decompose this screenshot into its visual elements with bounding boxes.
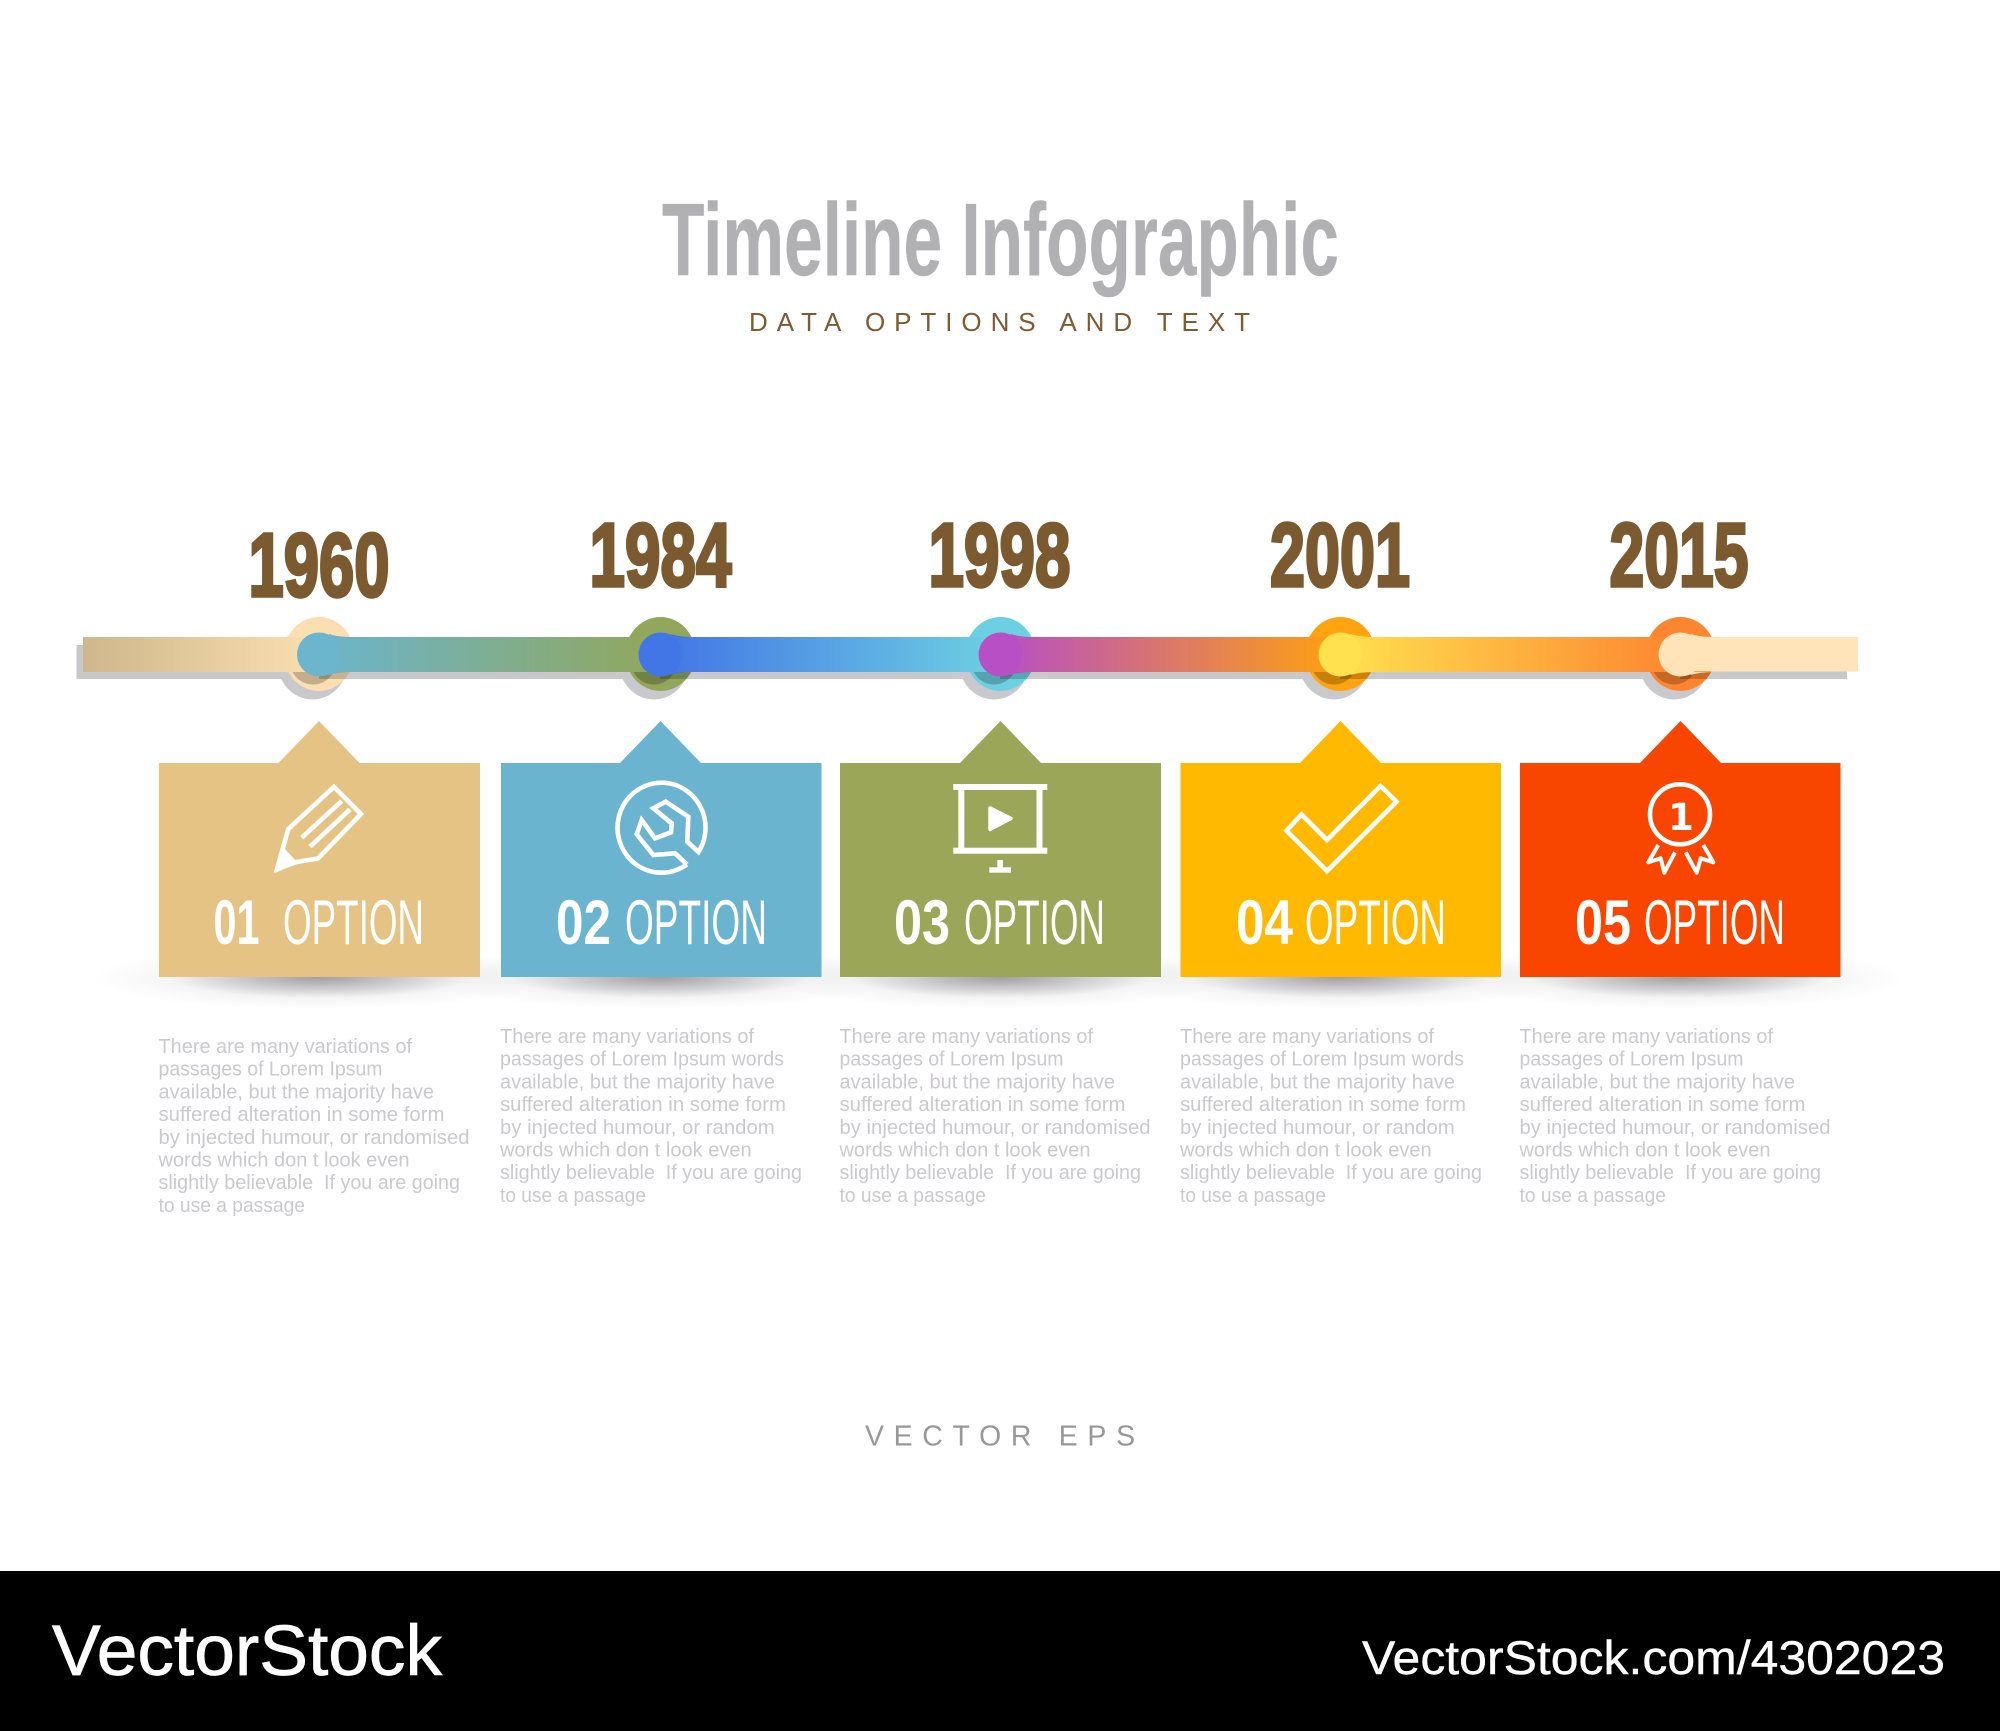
box with pointer <box>159 721 480 977</box>
text block 04: There are many variations of <box>1180 1026 1434 1048</box>
text block 01 <box>158 1036 470 1217</box>
text block 04: slightly believable If you are going <box>1180 1162 1482 1184</box>
text block 05: available, but the majority have <box>1520 1071 1795 1093</box>
icon: pencil <box>275 787 361 873</box>
box with pointer <box>840 721 1161 977</box>
text block 03: to use a passage <box>840 1185 986 1207</box>
text block 01: words which don t look even <box>158 1150 410 1172</box>
text block 05: to use a passage <box>1520 1185 1666 1207</box>
icon: wrench in circle <box>618 783 706 873</box>
text block 01: by injected humour, or randomised <box>158 1127 470 1149</box>
text block 04: words which don t look even <box>1179 1140 1432 1162</box>
text block 02: There are many variations of <box>500 1026 754 1048</box>
text block 02: passages of Lorem Ipsum words <box>500 1049 784 1071</box>
text block 05: suffered alteration in some form <box>1520 1094 1806 1116</box>
text block 02: words which don t look even <box>499 1140 752 1162</box>
text block 01: slightly believable If you are going <box>158 1172 460 1194</box>
footer url: VectorStock.com/4302023 <box>1362 1631 1945 1684</box>
text block 02: to use a passage <box>500 1185 646 1207</box>
label 03 option: 03 <box>894 888 950 958</box>
text block 04: suffered alteration in some form <box>1180 1094 1466 1116</box>
text block 04: by injected humour, or random <box>1180 1117 1455 1139</box>
label 01 option <box>214 888 424 958</box>
bar shadow over nodes <box>319 672 1712 679</box>
text block 04: available, but the majority have <box>1180 1071 1455 1093</box>
text block 03: passages of Lorem Ipsum <box>840 1049 1064 1071</box>
year 1984: 1984 <box>590 506 732 606</box>
label 05 option <box>1575 888 1785 958</box>
text block 03: words which don t look even <box>839 1140 1091 1162</box>
label 02 option <box>556 888 767 958</box>
text block 02: available, but the majority have <box>500 1071 775 1093</box>
year 1960: 1960 <box>248 516 390 616</box>
label 04 option: 04 <box>1236 888 1293 958</box>
icon: award medal: 1 <box>1668 796 1694 839</box>
text block 01: passages of Lorem Ipsum <box>158 1059 382 1081</box>
footer band <box>0 1571 2000 1731</box>
icon: check mark <box>1286 786 1396 871</box>
icon: presentation screen <box>953 784 1047 873</box>
text block 01: to use a passage <box>158 1195 305 1217</box>
bar shadow <box>76 645 1847 679</box>
footer logo: VectorStock <box>52 1612 443 1691</box>
label 03 option <box>894 888 1105 958</box>
year 2001: 2001 <box>1270 506 1410 606</box>
timeline bar with nodes <box>76 617 1858 700</box>
label 01 option: OPTION <box>283 888 424 958</box>
text block 01: suffered alteration in some form <box>158 1104 444 1126</box>
label 01 option: 01 <box>214 888 260 958</box>
text block 05: passages of Lorem Ipsum <box>1520 1049 1744 1071</box>
box with pointer <box>501 721 822 977</box>
box with pointer <box>1520 721 1840 977</box>
year labels <box>248 506 1748 616</box>
text block 02: suffered alteration in some form <box>500 1094 786 1116</box>
text block 05: words which don t look even <box>1519 1140 1771 1162</box>
text block 01: available, but the majority have <box>158 1081 434 1103</box>
label 03 option: OPTION <box>964 888 1105 958</box>
box shadows <box>94 946 1905 1010</box>
text block 03: There are many variations of <box>840 1026 1093 1048</box>
text block 05 <box>1519 1026 1830 1207</box>
year 2015: 2015 <box>1610 506 1748 606</box>
vector eps caption: VECTOR EPS <box>865 1421 1135 1453</box>
text block 02: by injected humour, or random <box>500 1117 775 1139</box>
year 1998: 1998 <box>928 506 1070 606</box>
label 05 option: OPTION <box>1644 888 1785 958</box>
panel: option 03 <box>840 721 1161 977</box>
text block 04: passages of Lorem Ipsum words <box>1180 1049 1464 1071</box>
text block 05: by injected humour, or randomised <box>1520 1117 1830 1139</box>
text block 03: slightly believable If you are going <box>840 1162 1141 1184</box>
text block 02: slightly believable If you are going <box>500 1162 802 1184</box>
text block 03: by injected humour, or randomised <box>840 1117 1150 1139</box>
label 04 option <box>1236 888 1446 958</box>
label 04 option: OPTION <box>1305 888 1446 958</box>
panel: option 04 <box>1180 721 1501 977</box>
label 02 option: 02 <box>556 888 611 958</box>
bar segments <box>83 637 1858 672</box>
title: Timeline Infographic <box>662 182 1339 297</box>
panel: option 05 <box>1520 721 1840 977</box>
text block 03: available, but the majority have <box>840 1071 1115 1093</box>
subtitle: DATA OPTIONS AND TEXT <box>749 307 1250 337</box>
text block 02 <box>499 1026 802 1207</box>
text block 04 <box>1179 1026 1482 1207</box>
node shadows <box>278 626 1709 700</box>
text block 05: There are many variations of <box>1520 1026 1773 1048</box>
label 02 option: OPTION <box>625 888 767 958</box>
icon: award medal <box>1648 784 1713 873</box>
text block 03 <box>839 1026 1150 1207</box>
box with pointer <box>1180 721 1501 977</box>
inner node shadows <box>290 638 1697 684</box>
text block 05: slightly believable If you are going <box>1520 1162 1821 1184</box>
text block 01: There are many variations of <box>158 1036 412 1058</box>
panel: option 02 <box>501 721 822 977</box>
inner node circles <box>297 632 1714 676</box>
panel: option 01 <box>159 721 480 977</box>
outer node circles <box>284 617 1716 691</box>
text block 04: to use a passage <box>1180 1185 1326 1207</box>
label 05 option: 05 <box>1575 888 1631 958</box>
text block 03: suffered alteration in some form <box>840 1094 1126 1116</box>
